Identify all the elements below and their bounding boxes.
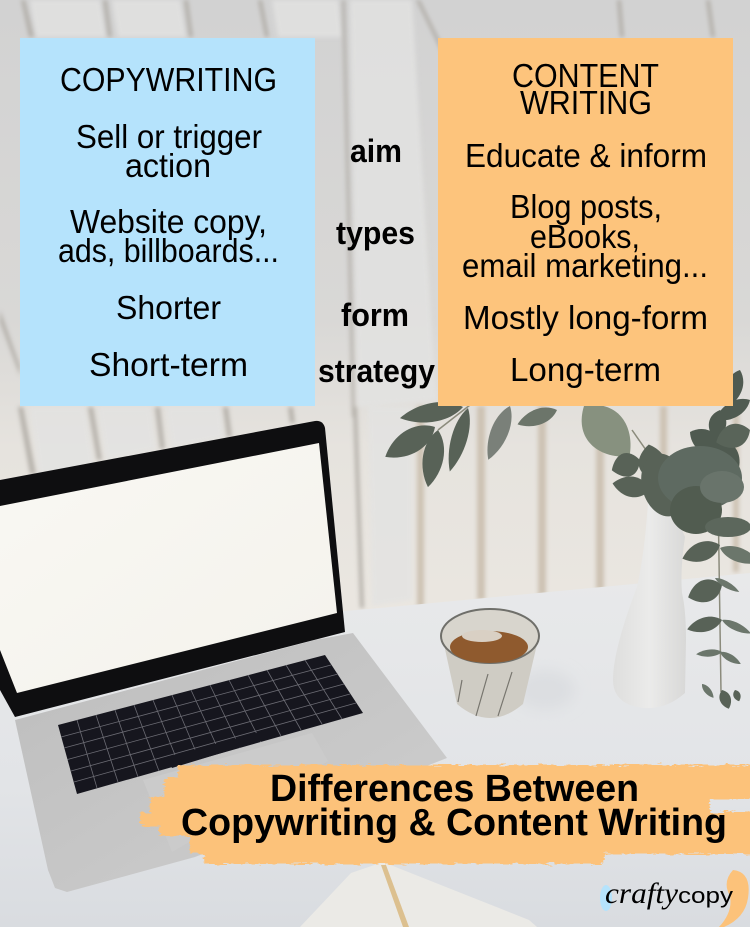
types: copywriting: Website copy, — [70, 203, 267, 240]
comparison labels — [318, 133, 435, 389]
logo: crafty copy: copy — [678, 883, 733, 908]
heading: content writing: WRITING — [520, 84, 652, 121]
panel: copywriting — [20, 38, 315, 406]
plant: eucalyptus branches — [379, 367, 750, 711]
heading: content writing: CONTENT — [512, 57, 659, 94]
strategy: copywriting: Short-term — [89, 346, 248, 383]
types: copywriting — [58, 203, 279, 269]
title — [181, 768, 727, 844]
types: content writing — [462, 188, 708, 284]
comparison labels: form — [341, 297, 409, 333]
logo: crafty copy: crafty — [605, 877, 679, 910]
strategy: content writing: Long-term — [510, 351, 661, 388]
aim: copywriting: action — [125, 147, 211, 184]
comparison labels: strategy — [318, 353, 435, 389]
panel: content writing — [438, 38, 733, 406]
coffee cup — [441, 609, 575, 718]
heading: content writing — [512, 57, 659, 121]
title banner: brush stroke — [140, 765, 750, 864]
logo: crafty copy — [600, 870, 749, 927]
types: content writing: Blog posts, — [510, 188, 662, 225]
vase — [613, 502, 686, 708]
form: content writing: Mostly long-form — [463, 299, 708, 336]
comparison labels: aim — [350, 133, 402, 169]
aim: content writing: Educate & inform — [465, 137, 707, 174]
form: copywriting: Shorter — [116, 289, 221, 326]
notebook and pencil — [300, 862, 537, 927]
background: slatted wall — [0, 0, 750, 640]
aim: copywriting: Sell or trigger — [76, 118, 262, 155]
aim: copywriting — [76, 118, 262, 184]
types: content writing: eBooks, — [530, 218, 640, 255]
title: Differences Between — [270, 768, 639, 810]
types: content writing: email marketing... — [462, 247, 708, 284]
types: copywriting: ads, billboards... — [58, 232, 279, 269]
heading: copywriting: COPYWRITING — [60, 61, 277, 98]
keyboard — [58, 655, 363, 794]
laptop base — [15, 633, 447, 892]
table top — [0, 573, 750, 927]
laptop — [0, 421, 447, 892]
title: Copywriting & Content Writing — [181, 802, 727, 844]
laptop lid — [0, 421, 345, 717]
comparison labels: types — [336, 215, 415, 251]
laptop screen — [0, 443, 337, 693]
